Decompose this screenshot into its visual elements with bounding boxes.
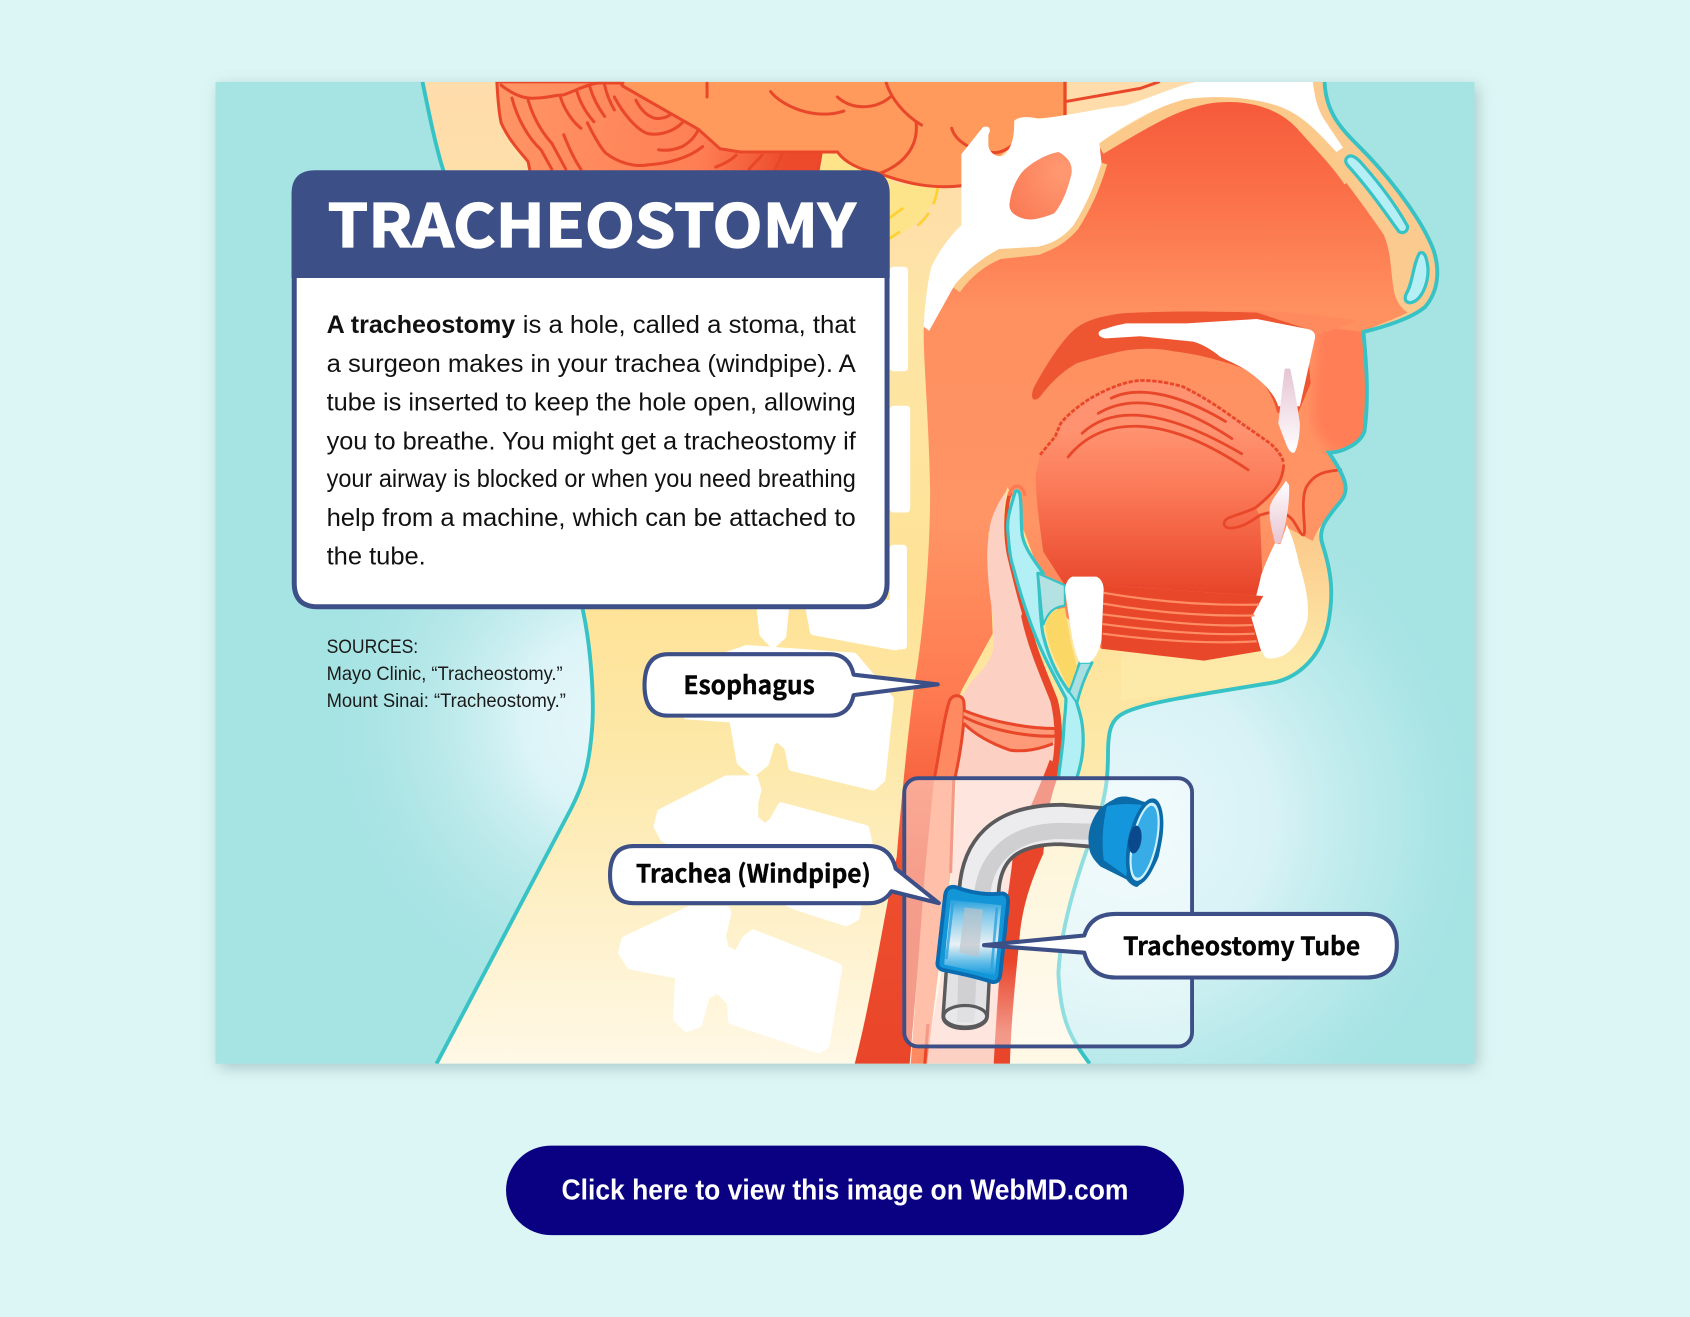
brain and cerebellum fold lines — [501, 82, 1159, 187]
main orange tissue — [855, 98, 1408, 1064]
face and neck outline — [422, 82, 1437, 1064]
tongue muscle lines — [1068, 392, 1341, 535]
thyroid soft tissue — [1038, 573, 1065, 625]
tube inset box — [904, 778, 1192, 1046]
definition text — [327, 312, 856, 571]
tube blue flange — [1088, 795, 1170, 888]
vertebrae — [622, 271, 906, 1050]
callout: Trachea (Windpipe): Trachea (Windpipe) — [636, 855, 871, 891]
definition text: help from a machine, which can be attached to — [327, 505, 856, 532]
definition text: A tracheostomy — [327, 312, 515, 339]
yellow tissue behind skull — [820, 154, 936, 240]
hard palate bone — [1099, 319, 1315, 406]
esophagus pink airway — [925, 490, 1055, 1064]
floor of mouth muscle — [1102, 585, 1263, 661]
lower cartilage strip — [1069, 663, 1092, 703]
brain — [624, 82, 1067, 186]
orange halo above epiglottis — [1009, 486, 1025, 496]
sources text — [327, 636, 566, 712]
cuff grey center strip — [959, 907, 983, 957]
title: TRACHEOSTOMY — [328, 179, 856, 265]
sphenoid sinus — [1009, 152, 1072, 219]
tube lower tip — [943, 970, 989, 1028]
callout: Trachea (Windpipe) — [610, 846, 939, 903]
button: view on WebMD — [506, 1146, 1184, 1235]
red wall lower strip — [1025, 616, 1058, 767]
upper lip tissue — [1312, 328, 1365, 450]
callout: Esophagus — [645, 654, 938, 716]
palate light band — [1322, 328, 1335, 334]
sources text: SOURCES: — [327, 636, 418, 658]
red wall upper strip — [1006, 494, 1025, 616]
sources text: Mount Sinai: “Tracheostomy.” — [327, 690, 566, 712]
cerebellum — [495, 82, 822, 170]
skin and neck fill — [424, 82, 1322, 1064]
trachea red band — [994, 760, 1062, 1064]
palate — [1032, 311, 1311, 414]
button: view on WebMD: Click here to view this image on WebMD.com — [562, 1175, 1128, 1207]
tongue — [1036, 380, 1284, 596]
larynx band lines — [925, 710, 1055, 1064]
orange loop of cricoid — [934, 696, 964, 778]
tube curved shaft — [979, 824, 1102, 900]
sources text: Mayo Clinic, “Tracheostomy.” — [327, 663, 563, 685]
nostril cartilage — [1405, 253, 1428, 303]
definition text: a surgeon makes in your trachea (windpipe). A — [327, 351, 856, 378]
chin skin — [1121, 528, 1329, 688]
upper incisor — [1278, 369, 1300, 453]
skull bone peach edge — [955, 96, 1349, 289]
definition text: the tube. — [327, 544, 426, 571]
lower jaw bone — [1251, 525, 1308, 659]
lighter orange trachea wall — [911, 775, 955, 1064]
hyoid bone — [1065, 577, 1104, 663]
definition text: tube is inserted to keep the hole open, allowing — [327, 390, 856, 417]
title banner — [292, 170, 890, 278]
icon: tracheostomy tube — [937, 795, 1170, 1028]
cuff side strips — [946, 903, 997, 970]
definition text: is a hole, called a stoma, that — [523, 312, 856, 339]
callout: Tracheostomy Tube: Tracheostomy Tube — [1123, 927, 1360, 963]
callout: Esophagus: Esophagus — [683, 666, 815, 702]
tongue surface dashed edge — [1040, 380, 1284, 463]
nasal cartilage upper — [1346, 156, 1408, 233]
trachea red band through inset — [996, 806, 1052, 1045]
tube blue cuff — [937, 887, 1008, 982]
cuff inner gradient — [944, 900, 1001, 975]
panel: anatomy illustration background — [216, 82, 1474, 1064]
definition text: you to breathe. You might get a tracheostomy if — [327, 428, 856, 455]
panel: anatomical cross-section of head and neck — [390, 82, 1440, 1064]
lower incisor — [1269, 481, 1289, 543]
thyroid yellow cartilage — [1045, 608, 1077, 690]
nose skin — [1312, 82, 1436, 328]
floor of mouth stripes — [1103, 593, 1259, 642]
callout: Tracheostomy Tube — [984, 914, 1397, 978]
definition text: your airway is blocked or when you need breathing — [327, 466, 856, 493]
larynx muscle bands — [964, 710, 1055, 751]
larynx cartilage — [1008, 491, 1092, 778]
skull bone — [924, 82, 1343, 331]
yellow dashed lines — [888, 188, 938, 239]
panel: title and definition box — [292, 170, 890, 607]
